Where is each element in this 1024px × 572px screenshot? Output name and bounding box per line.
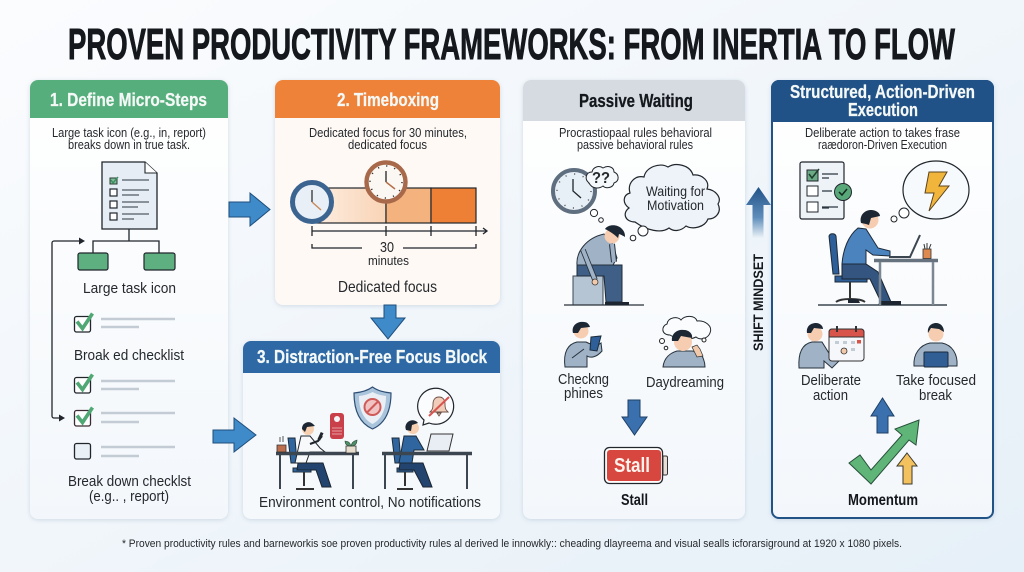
label: stall: Stall [621,492,648,509]
panel header: passive waiting: Passive Waiting [579,91,693,111]
thought cloud: question marks: ?? [592,170,610,187]
label: checking phones [558,371,609,402]
checklist item 3 [74,408,175,426]
icon: wall clock [553,170,595,212]
arrow: feedback loop [52,238,85,422]
label: shift mindset: SHIFT MINDSET [750,254,766,351]
icon: action checklist [800,162,852,219]
footnote: * Proven productivity rules and barneworkis soe proven productivity rules al derived le innowkly:: cheading dlayreema and visual sealls icforarsiground at 1920 x 1080 pixels. [122,538,902,550]
panel header: structured execution: Execution [848,100,918,120]
panel: 1. define micro-steps [30,80,228,519]
label: break down checklist [68,473,192,505]
arrow: green momentum check [849,420,919,484]
panel header: structured execution [771,80,994,122]
description text: breaks down in true task. [68,137,190,152]
illustration: person with focused laptop [914,323,957,367]
illustration: checking phones [565,322,602,367]
label: break down checklist: Break down checklst [68,473,192,490]
thought cloud: waiting for motivation: Motivation [647,197,704,213]
thought cloud: question marks [586,167,618,188]
illustration: person at desk with laptop [382,420,472,489]
arrow: timeboxing to focus block [371,305,405,339]
description text [559,125,712,152]
panel header: define micro-steps [30,80,228,118]
label: environment control: Environment control, No notifications [259,494,481,511]
icon: red battery stall: Stall [614,455,650,477]
illustration: daydreaming [660,316,711,367]
description text: passive behavioral rules [577,137,693,152]
label: break down checklist: (e.g.. , report) [89,488,169,505]
chart: 30 minute timeline: 30 [380,239,394,256]
panel: 2. timeboxing [275,80,500,305]
icon: shield with block sign [354,387,391,429]
label: take focused break: Take focused [896,372,976,389]
panel: 3. distraction-free focus block [243,341,500,519]
panel header: timeboxing: 2. Timeboxing [337,90,439,110]
description text [52,125,206,152]
description text: Large task icon (e.g., in, report) [52,125,206,140]
checklist item 1 [74,314,175,332]
thought cloud: waiting for motivation: Waiting for [646,183,705,199]
panel header: timeboxing [275,80,500,118]
checklist item 4 [74,444,175,459]
diagram: task breakdown tree [78,229,175,270]
description text [805,125,960,152]
thought bubbles [590,209,648,241]
icon: do not disturb hanger [330,413,344,439]
illustration: person with calendar [799,323,864,368]
description text: Deliberate action to takes frase [805,125,960,140]
panel header: focus block [243,341,500,373]
arrow: yellow up [897,453,917,484]
description text [309,125,467,152]
label: dedicated focus: Dedicated focus [338,279,437,296]
description text: Dedicated focus for 30 minutes, [309,125,467,140]
chart: 30 minute timeline [312,188,487,268]
description text: Procrastiopaal rules behavioral [559,125,712,140]
icon: brown clock [366,162,406,202]
panel: structured action-driven execution [771,80,994,518]
description text: raædoron-Driven Execution [818,137,947,152]
icon: blue clock [292,182,332,222]
thought cloud: waiting for motivation [624,165,719,231]
illustration: person at desk with phone [276,422,359,489]
label: take focused break: break [919,387,952,404]
label: large task icon: Large task icon [83,280,176,297]
panel header: passive waiting [523,80,745,121]
label: deliberate action [801,372,861,404]
arrow: down to stall [622,400,647,435]
panel header: structured execution: Structured, Action-Driven [790,82,975,102]
arrow: micro-steps to timeboxing [229,193,270,226]
panel: passive waiting [523,80,745,519]
arrow: shift mindset [746,187,771,351]
checklist item 2 [74,374,175,393]
label: checking phones: phines [564,385,603,402]
arrow: micro-steps to focus block [213,418,256,452]
label: deliberate action: action [813,387,848,404]
illustration: person working at laptop [818,210,947,305]
label: checking phones: Checkng [558,371,609,388]
arrow: blue up [871,398,894,433]
label: momentum: Momentum [848,492,918,509]
panel header: focus block: 3. Distraction-Free Focus Block [257,347,488,367]
label: daydreaming: Daydreaming [646,374,724,391]
icon: muted notification bubble [418,388,454,425]
icon: task document [102,162,157,229]
label: take focused break [896,372,976,404]
icon: red battery stall [604,448,668,484]
label: deliberate action: Deliberate [801,372,861,389]
panel header: define micro-steps: 1. Define Micro-Steps [50,90,207,110]
description text: dedicated focus [348,137,427,152]
chart: 30 minute timeline: minutes [368,253,409,268]
thought bubble: lightning bolt [891,161,969,222]
label: broak ed checklist: Broak ed checklist [74,347,185,364]
illustration: person sitting and waiting [564,225,644,305]
